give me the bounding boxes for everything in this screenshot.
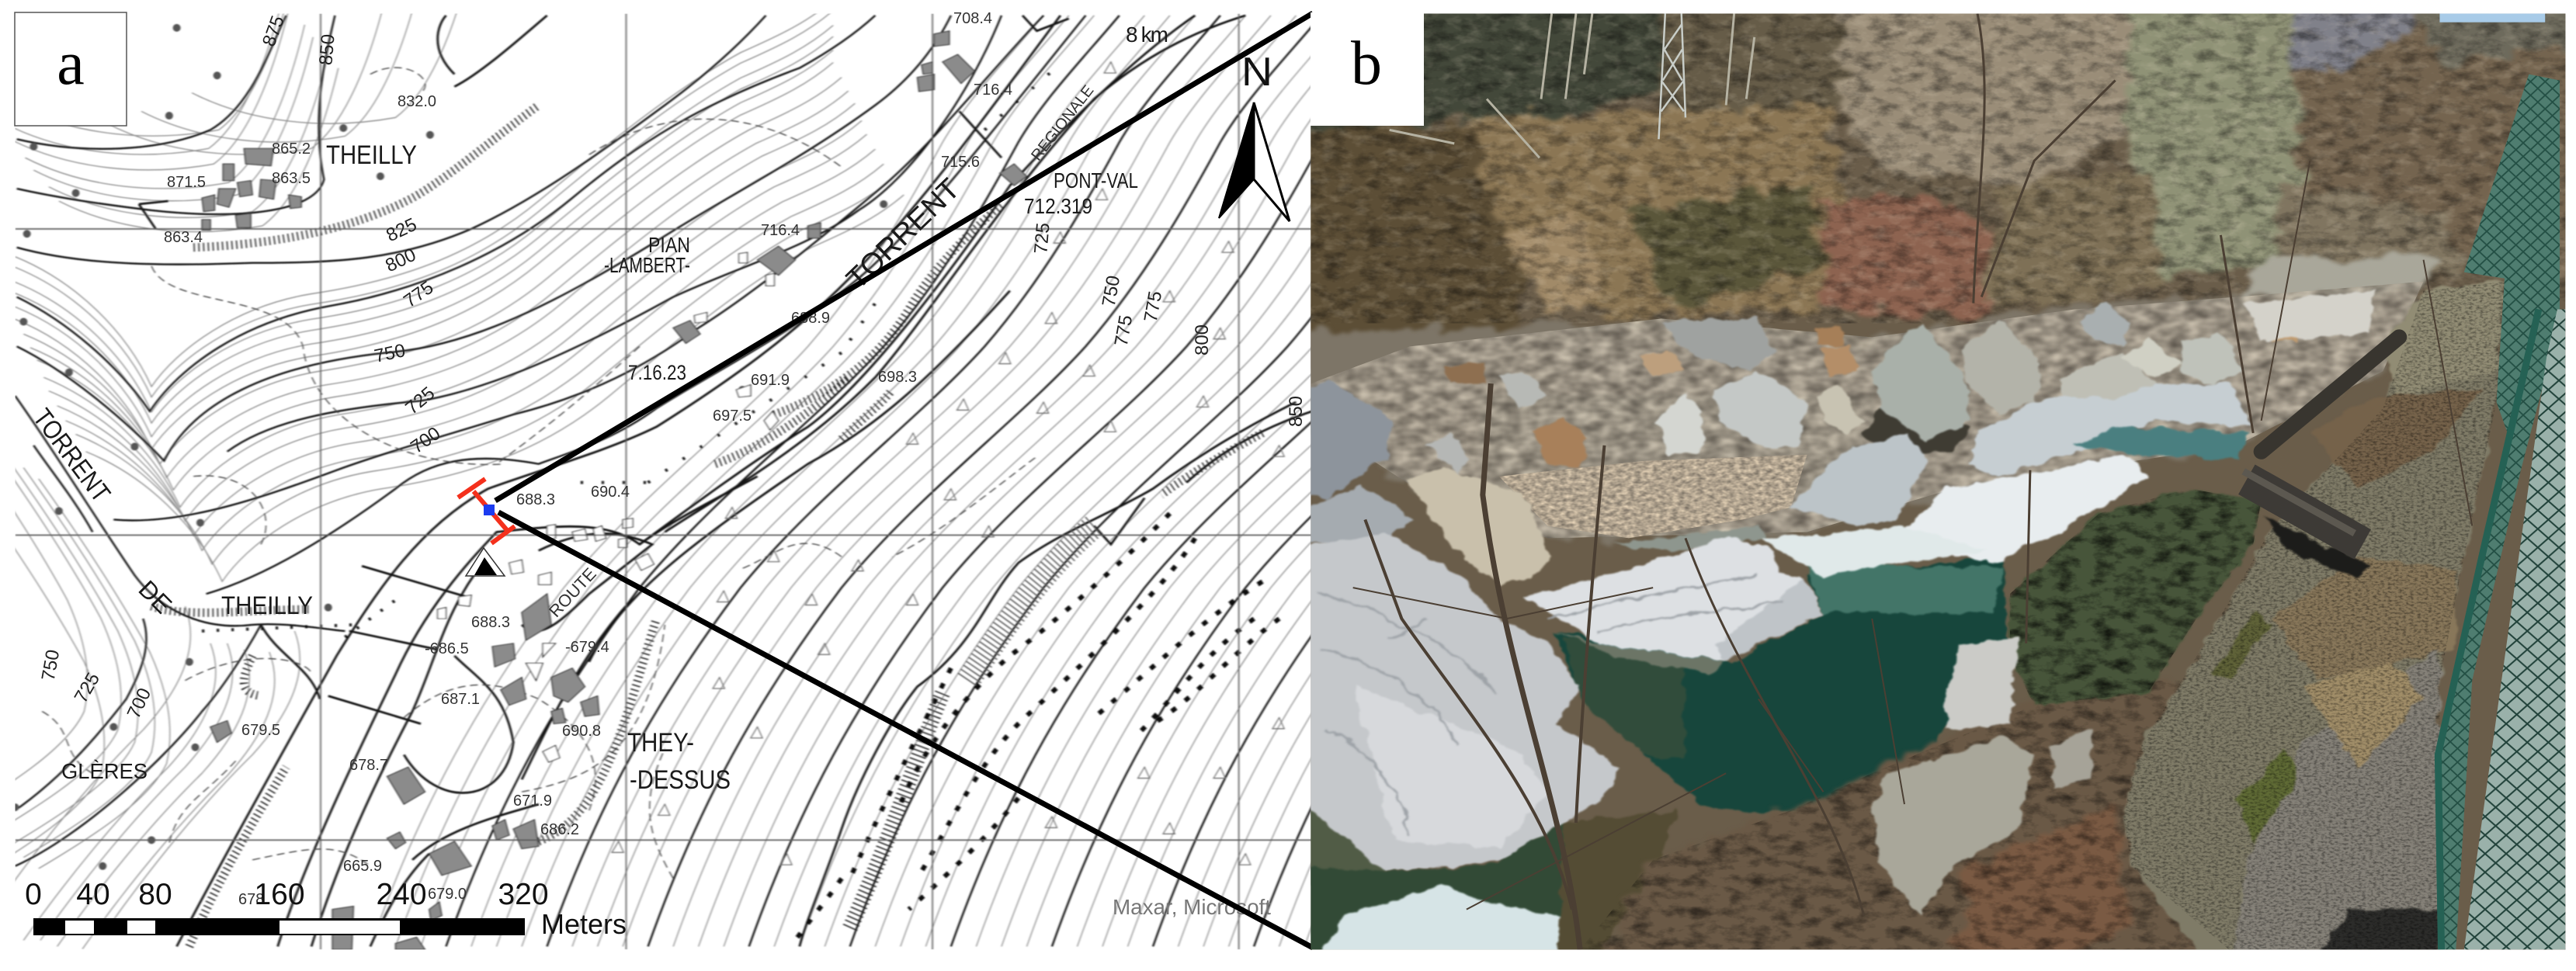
lower left stream (1288, 810, 1678, 971)
map place names and elevations: 800 (1192, 324, 1213, 355)
map place names and elevations: -DESSUS (630, 765, 731, 795)
bush foliage (2001, 483, 2269, 712)
map place names and elevations: 679.5 (241, 722, 280, 739)
map place names and elevations: 688.3 (471, 614, 510, 631)
map place names and elevations: THEY- (627, 728, 694, 758)
map place names and elevations: 690.4 (591, 484, 630, 501)
map place names and elevations: DE (134, 575, 177, 619)
map place names and elevations: 750 (373, 340, 407, 367)
gravel bar (1491, 452, 1815, 544)
vegetation shading (1311, 14, 2565, 323)
map place names and elevations: 697.5 (713, 407, 752, 425)
map place names and elevations (27, 10, 1307, 908)
bare foreground branches (1353, 14, 2472, 949)
scale bar: Meters (541, 908, 627, 940)
road and torrent banks (139, 16, 1321, 946)
scale bar (25, 878, 627, 940)
map place names and elevations: 665.9 (343, 858, 382, 875)
map place names and elevations: 875 (259, 13, 289, 50)
map place names and elevations: PIAN (648, 233, 690, 257)
triangulation triangle symbol (466, 548, 505, 576)
map place names and elevations: 678.7 (349, 757, 388, 774)
map place names and elevations: 750 (1099, 274, 1124, 308)
pipeline (2244, 337, 2399, 544)
scale bar: 40 (76, 878, 110, 911)
map place names and elevations: 725 (1030, 222, 1054, 255)
map place names and elevations: TORRENT (841, 172, 967, 296)
panel letter b: b (1351, 29, 1382, 98)
map place names and elevations: 715.6 (941, 154, 980, 171)
pale birch trunks (1390, 14, 1755, 158)
green bush (2010, 489, 2262, 706)
scale bar: 80 (138, 878, 172, 911)
map place names and elevations: 863.4 (164, 229, 203, 246)
map place names and elevations: PONT-VAL (1054, 168, 1138, 192)
small outlined buildings (438, 252, 779, 762)
pool and cascades (1556, 455, 2147, 810)
bank and lower vegetation (1580, 681, 2229, 971)
map place names and elevations: 775 (1140, 290, 1166, 324)
map place names and elevations: 850 (1286, 396, 1307, 427)
large mossy boulder (2123, 282, 2505, 971)
map place names and elevations: 725 (71, 669, 104, 706)
north arrow (1219, 50, 1290, 221)
scale bar: 320 (498, 878, 549, 911)
map grid (16, 14, 1313, 949)
map place names and elevations: 679.0 (428, 886, 467, 903)
map place names and elevations: -686.5 (425, 640, 469, 657)
map place names and elevations: 8 km (1126, 23, 1168, 47)
map place names and elevations: 716.4 (761, 222, 800, 239)
boulders (1288, 291, 2375, 584)
buildings (202, 31, 1026, 949)
map place names and elevations: 690.8 (562, 723, 601, 740)
map place names and elevations: REGIONALE (1028, 82, 1097, 164)
hachures (151, 105, 1262, 946)
small tree and rock symbols (16, 28, 884, 866)
pipeline shadow (2265, 516, 2366, 578)
map place names and elevations: THEILLY (326, 140, 417, 170)
map place names and elevations: 712.319 (1024, 194, 1092, 218)
map place names and elevations: 698.3 (878, 369, 917, 386)
dashed paths (42, 68, 1035, 879)
map place names and elevations: 686.2 (540, 821, 579, 838)
map place names and elevations: 750 (38, 648, 64, 682)
site attribution: Maxar, Microsoft (1113, 895, 1271, 919)
rock scree marks (791, 514, 1279, 946)
map place names and elevations: 688.9 (791, 310, 830, 327)
background hillside and vegetation (1272, 0, 2576, 383)
river boulder dots (581, 71, 1052, 483)
power pylon (1658, 14, 1686, 139)
map place names and elevations: 708.4 (953, 10, 992, 27)
chain-link fence (2435, 75, 2565, 949)
panel b: photograph of the torrent (1255, 0, 2576, 971)
map place names and elevations: 7.16.23 (628, 361, 686, 384)
north arrow: N (1241, 50, 1272, 95)
map place names and elevations: 800 (382, 244, 419, 276)
map place names and elevations: 863.5 (272, 170, 311, 187)
map place names and elevations: TORRENT (27, 404, 116, 508)
lower rocks (1872, 637, 2091, 916)
foreground white rocks (1288, 532, 1824, 885)
vegetation highlights (1311, 14, 2565, 323)
cobble texture (1311, 272, 2438, 544)
red cross-section marker (458, 479, 515, 543)
map linework (16, 14, 1311, 950)
map place names and elevations: 691.9 (751, 372, 790, 389)
map place names and elevations: 700 (407, 423, 444, 458)
map background (15, 14, 1313, 949)
scale bar: 240 (376, 878, 427, 911)
map place names and elevations: 775 (400, 277, 437, 312)
map place names and elevations: ROUTE (545, 564, 600, 621)
boulder grain (2116, 279, 2521, 952)
map place names and elevations: 688.3 (516, 491, 555, 508)
panel letter a (15, 12, 127, 126)
bank shading (1572, 674, 2237, 952)
map place names and elevations: GLÈRES (61, 759, 148, 783)
panel a: topographic map (14, 11, 1312, 950)
photo scene base (1255, 0, 2576, 971)
map place names and elevations: THEILLY (221, 591, 313, 619)
rock veins (1321, 575, 1783, 835)
map place names and elevations: 850 (315, 33, 339, 66)
map place names and elevations: 716.4 (974, 81, 1012, 99)
sky patch (2439, 14, 2545, 23)
blue gauge point (484, 505, 495, 515)
map place names and elevations: -679.4 (565, 639, 609, 656)
scale bar: 160 (254, 878, 305, 911)
map place names and elevations: -LAMBERT- (604, 253, 690, 277)
map place names and elevations: 687.1 (441, 691, 480, 708)
scale bar: 0 (25, 878, 42, 911)
view cone lines (495, 13, 1313, 948)
rock bed base (1272, 254, 2439, 538)
map place names and elevations: 865.2 (272, 140, 311, 158)
map place names and elevations: 725 (401, 383, 439, 419)
upper water (2074, 427, 2253, 461)
panel letter b (1311, 12, 1424, 126)
map place names and elevations: 825 (383, 214, 420, 246)
map place names and elevations: 775 (1111, 314, 1137, 348)
map place names and elevations: 832.0 (398, 93, 436, 110)
map place names and elevations: 671.9 (513, 792, 552, 810)
map place names and elevations: 678. (238, 891, 269, 908)
map place names and elevations: 871.5 (167, 174, 206, 191)
panel letter a: a (57, 29, 85, 98)
map place names and elevations: 700 (123, 685, 155, 722)
